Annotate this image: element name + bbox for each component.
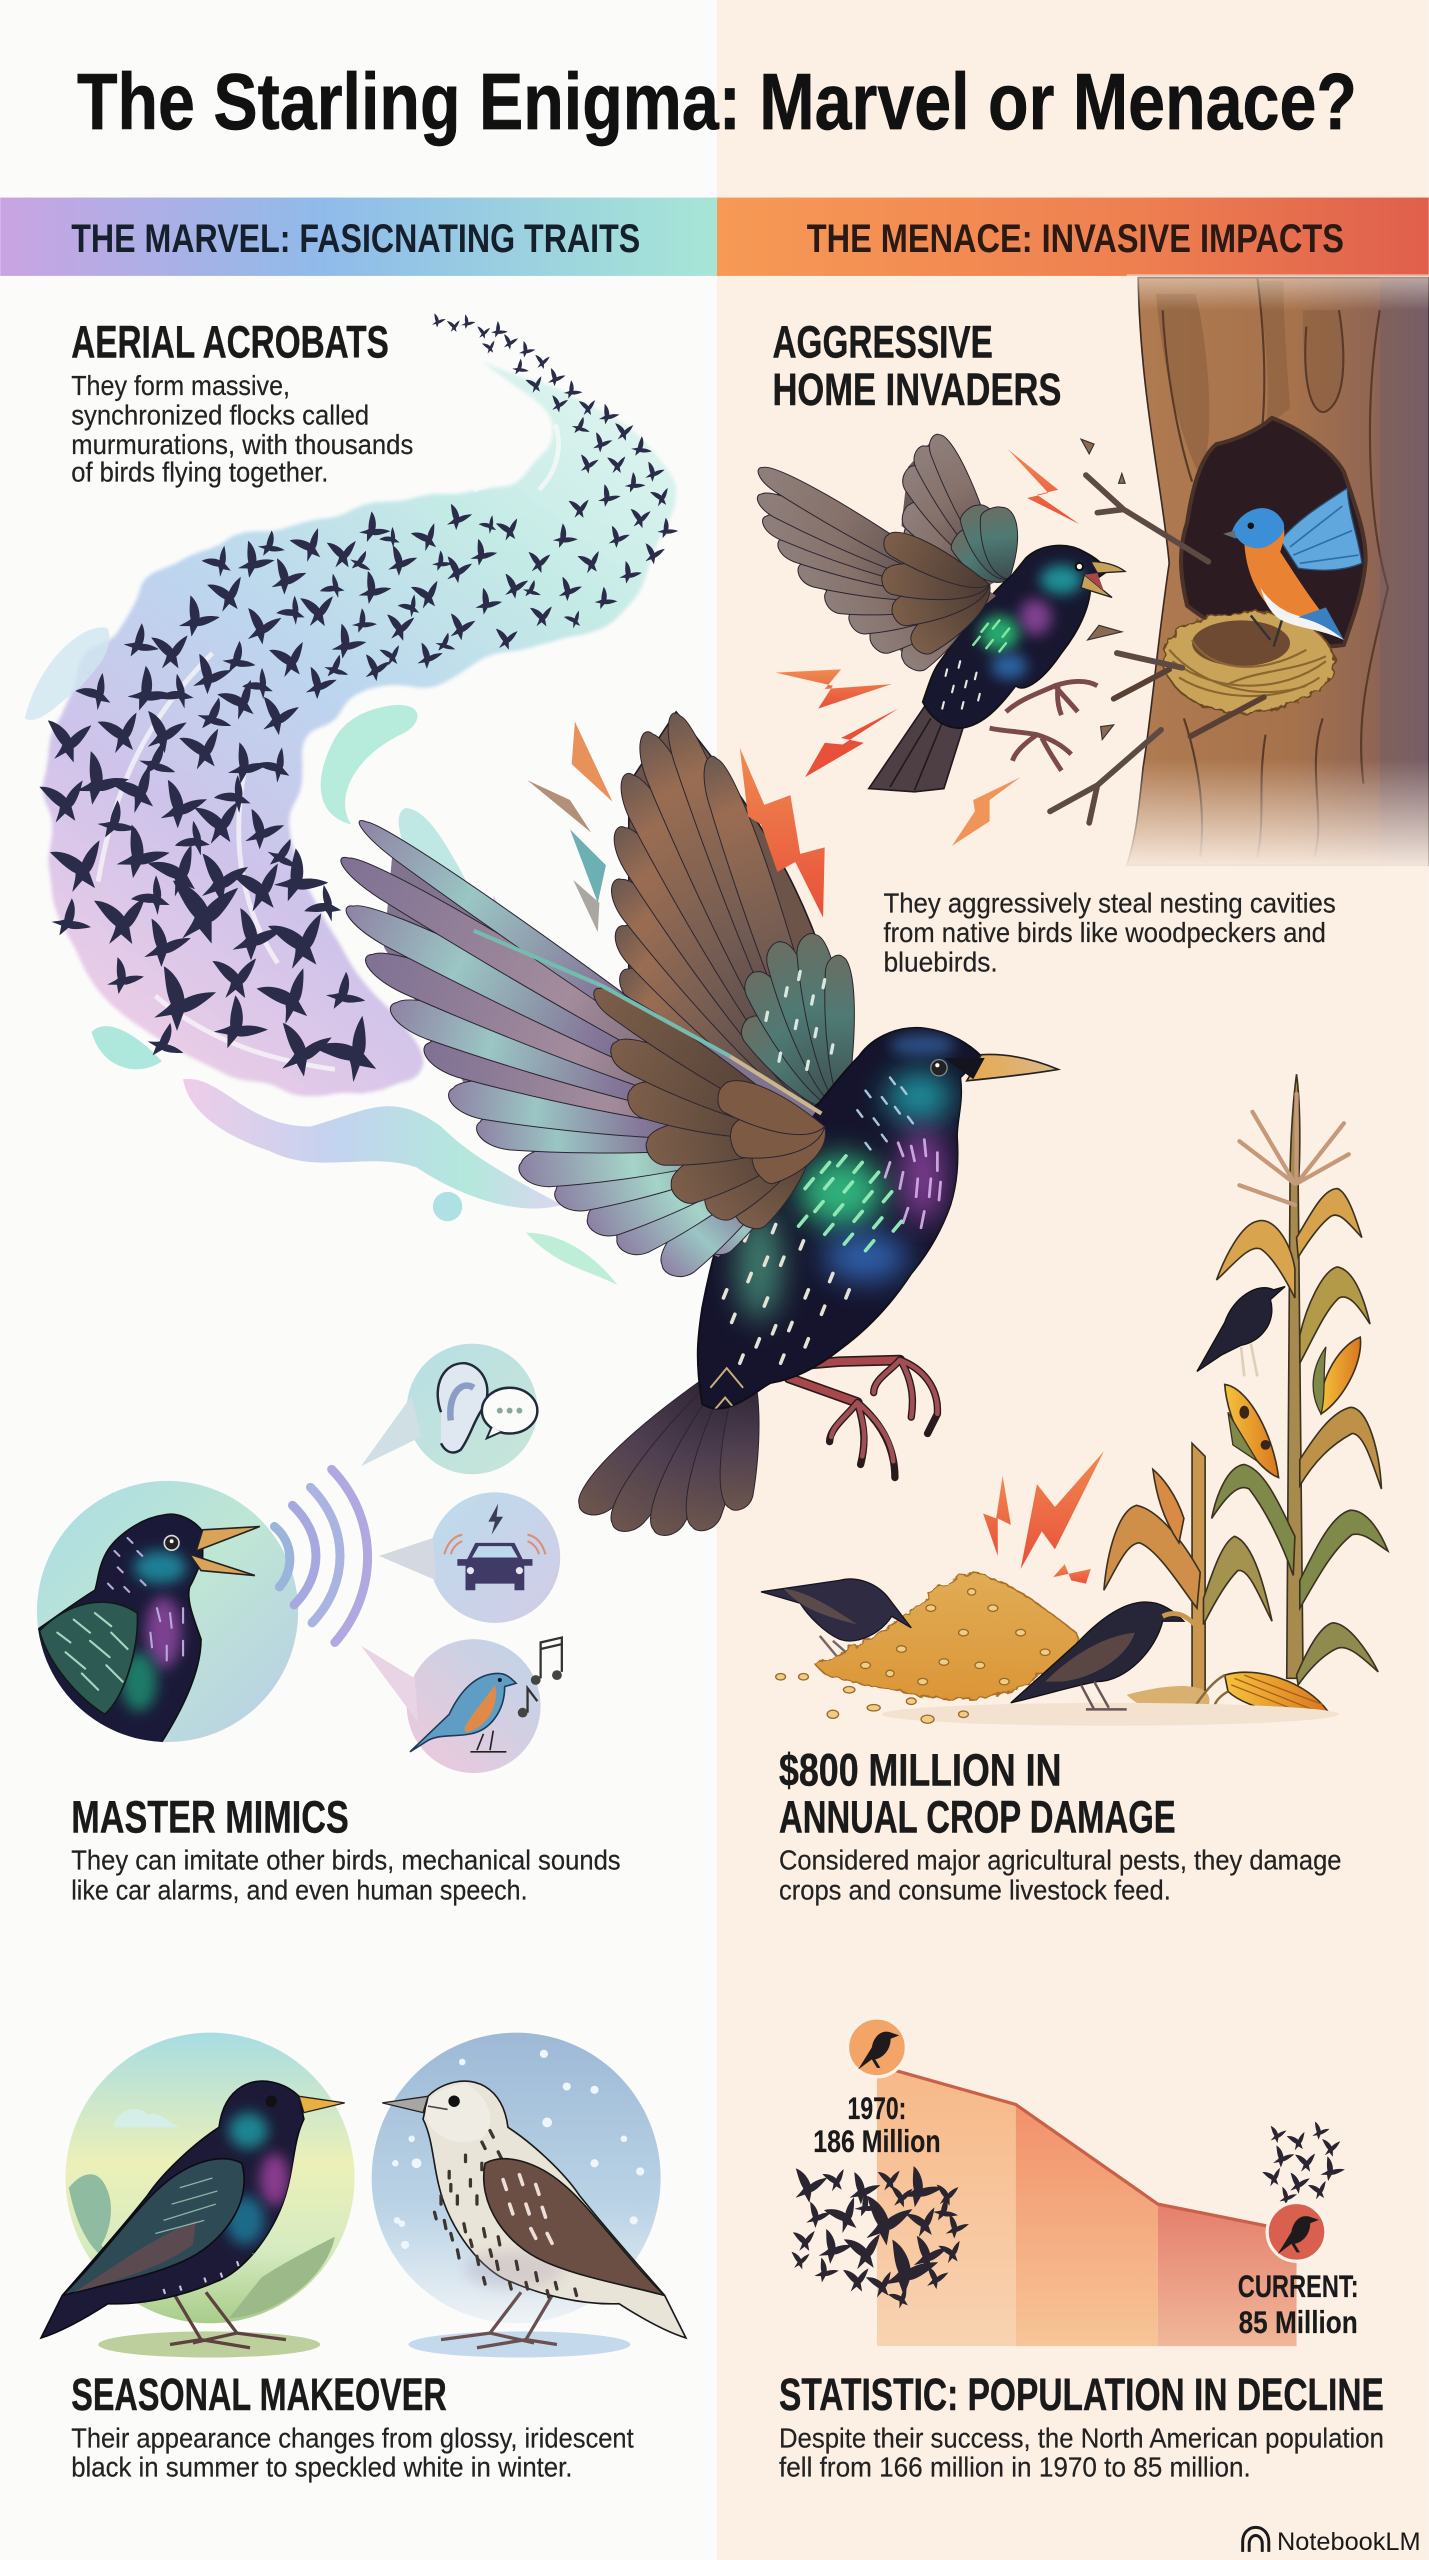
- text: master mimics description: They can imitate other birds, mechanical sounds: [71, 1844, 621, 1875]
- right side shading: [1380, 278, 1429, 865]
- fallen cob: [1225, 1672, 1328, 1715]
- icon: lightning bolts over grain: [983, 1451, 1104, 1584]
- icon: starling pecking grain: [761, 1579, 911, 1656]
- text: seasonal makeover description: [71, 2422, 634, 2483]
- big front wing feathers: [333, 812, 838, 1288]
- heading: crop damage: ANNUAL CROP DAMAGE: [779, 1792, 1176, 1843]
- banner: the menace: [717, 198, 1429, 276]
- illustration: winter starling in circle: [372, 2033, 686, 2358]
- leaves: [1217, 1221, 1295, 1298]
- heading: aggressive home invaders: AGGRESSIVE: [772, 317, 993, 368]
- flock 1970: [790, 2166, 970, 2311]
- area segment middle: [1016, 2104, 1158, 2346]
- marker 1970: [848, 2018, 906, 2077]
- illustration: attacking starling: [752, 429, 1125, 792]
- flock of birds: [39, 313, 680, 1091]
- background: left panel: [0, 0, 717, 2560]
- brown coverts: [725, 1116, 829, 1237]
- wing: [62, 2159, 244, 2296]
- bubble: car alarm: [379, 1492, 560, 1623]
- iridescent sheen on body: [706, 1033, 955, 1420]
- text: master mimics description: [71, 1844, 621, 1906]
- text: statistic description: [779, 2422, 1384, 2483]
- iridescent patches: [942, 565, 1083, 709]
- text: home invaders description: They aggressively steal nesting cavities: [883, 888, 1336, 919]
- heading: crop damage: [779, 1744, 1176, 1843]
- body: [698, 1028, 981, 1409]
- illustration: central iridescent starling: [333, 707, 1058, 1543]
- body: [923, 545, 1107, 728]
- background: right panel: [717, 0, 1429, 2560]
- label 1970: 1970:: [848, 2091, 906, 2126]
- text: aerial acrobats description: [71, 370, 413, 488]
- droplets and wisps: [321, 705, 418, 824]
- white swirl highlights: [98, 424, 559, 1069]
- legs: [170, 2292, 286, 2348]
- legs: [990, 681, 1097, 771]
- tail: [869, 702, 963, 792]
- illustration: grain pile: [776, 1573, 1339, 1726]
- text: home invaders description: from native birds like woodpeckers and: [883, 917, 1326, 948]
- heading: seasonal makeover: SEASONAL MAKEOVER: [71, 2369, 447, 2420]
- dark hollow: [1181, 418, 1366, 647]
- banner: the marvel: [0, 198, 717, 276]
- text: seasonal makeover description: black in summer to speckled white in winter.: [71, 2452, 572, 2483]
- wing: [484, 2159, 665, 2296]
- text: crop damage description: [779, 1844, 1341, 1906]
- icon: bluebird in cavity: [1223, 488, 1362, 647]
- bubble: bluebird song: [361, 1638, 562, 1773]
- logo: NotebookLM: NotebookLM: [1277, 2528, 1421, 2556]
- label current: 85 Million: [1239, 2305, 1358, 2340]
- corn cobs: [1225, 1384, 1279, 1478]
- beak: [1081, 562, 1125, 598]
- heading: master mimics: MASTER MIMICS: [71, 1792, 349, 1843]
- heading: crop damage: $800 MILLION IN: [779, 1744, 1061, 1795]
- marker current: [1267, 2202, 1326, 2261]
- text: home invaders description: [883, 888, 1336, 977]
- lightning by wing: [740, 748, 825, 918]
- icon: starling eating crop: [1011, 1602, 1202, 1709]
- bark shading: [1156, 281, 1343, 477]
- extra density: [379, 526, 404, 551]
- text: crop damage description: Considered major agricultural pests, they damage: [779, 1844, 1341, 1875]
- ground husk: [1127, 1686, 1209, 1714]
- illustration: singing starling portrait: [33, 1481, 298, 1747]
- icon: starling perched on corn: [1197, 1287, 1285, 1376]
- illustration: tree with nesting cavity: [1123, 274, 1429, 873]
- text: statistic description: fell from 166 million in 1970 to 85 million.: [779, 2452, 1251, 2483]
- heading: aggressive home invaders: [772, 317, 1061, 415]
- tail feathers: [568, 1343, 765, 1543]
- iridescent ribbon: [46, 362, 674, 1094]
- flock current: [1262, 2122, 1346, 2207]
- legs and claws: [789, 1360, 937, 1478]
- shards near wing: [528, 722, 612, 932]
- text: crop damage description: crops and consume livestock feed.: [779, 1875, 1171, 1906]
- text: aerial acrobats description: They form massive,: [71, 370, 290, 401]
- text: aerial acrobats description: of birds flying together.: [71, 457, 328, 488]
- label 1970: 186 Million: [813, 2124, 941, 2159]
- illustration: murmuration swirl: [25, 313, 680, 1285]
- text: home invaders description: bluebirds.: [883, 946, 998, 977]
- legs: [441, 2292, 557, 2348]
- text: aerial acrobats description: synchronized flocks called: [71, 399, 369, 430]
- leading edge of wing: [474, 931, 730, 1056]
- front wing: [752, 459, 1002, 678]
- area segment 1970 to first drop: [877, 2065, 1016, 2346]
- text: aerial acrobats description: murmurations, with thousands: [71, 429, 413, 460]
- heading: aerial acrobats: AERIAL ACROBATS: [71, 317, 389, 368]
- icon: debris shards and twigs: [1050, 439, 1208, 823]
- label 1970: [813, 2091, 941, 2159]
- upper wing: [894, 429, 1024, 595]
- icon: lightning bolts around attacker: [776, 449, 1079, 846]
- text: seasonal makeover description: Their appearance changes from glossy, iridescent: [71, 2422, 634, 2453]
- illustration: summer starling in circle: [41, 2033, 355, 2358]
- text: statistic description: Despite their success, the North American population: [779, 2422, 1384, 2453]
- stalks: [1287, 1074, 1303, 1678]
- text: master mimics description: like car alarms, and even human speech.: [71, 1875, 528, 1906]
- illustration: corn stalks: [1104, 1074, 1388, 1715]
- area segment current: [1158, 2204, 1297, 2346]
- bark grooves: [1163, 278, 1388, 857]
- upper wing feathers: [599, 707, 859, 1146]
- tassels: [1239, 1094, 1349, 1205]
- beak and eye: [967, 1054, 1058, 1081]
- chart: population decline area: [790, 2018, 1359, 2346]
- banner: the marvel: THE MARVEL: FASICNATING TRAITS: [71, 217, 640, 261]
- label current: [1238, 2269, 1359, 2340]
- label current: CURRENT:: [1238, 2269, 1359, 2304]
- heading: aggressive home invaders: HOME INVADERS: [772, 364, 1061, 415]
- icon: sound waves: [274, 1469, 368, 1642]
- fade at top and bottom: [1123, 759, 1429, 873]
- illustration: nest with sticks: [1114, 613, 1334, 736]
- bubble: ear and speech: [361, 1344, 537, 1474]
